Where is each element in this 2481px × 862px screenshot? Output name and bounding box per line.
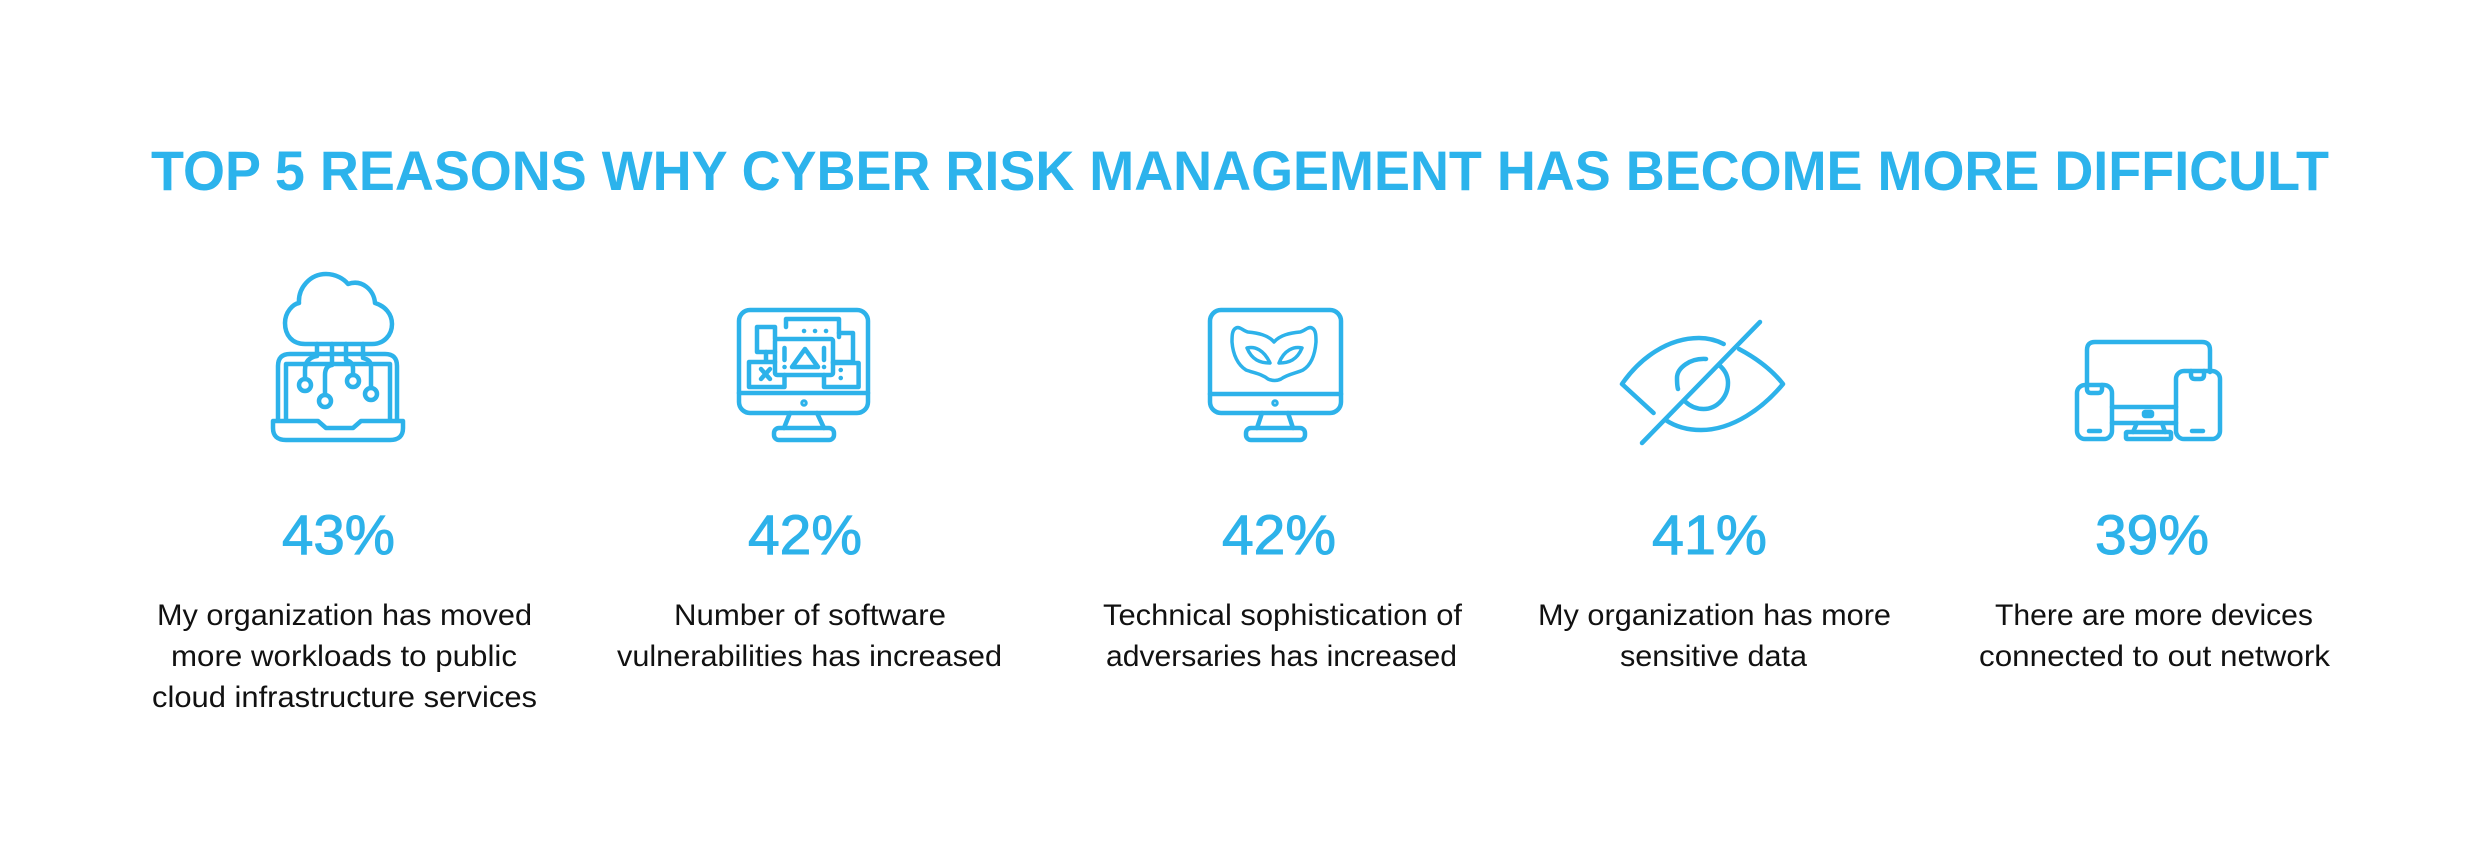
icon: crossed-out eye [1622,322,1783,443]
description: connected devices: connected to out network [1979,640,2331,673]
description: software vulnerabilities [617,599,1002,673]
panel: sensitive data [1538,322,1891,673]
description: cloud workloads: more workloads to public [171,640,517,673]
stat: 39%: 39% [2095,503,2209,566]
description: sensitive data: My organization has more [1538,599,1891,632]
description: connected devices [1979,599,2331,673]
description: sensitive data: sensitive data [1620,640,1807,673]
icon: monitor with mask [1210,310,1341,440]
icon: monitor, phone and tablet [2077,342,2220,439]
panel: public cloud workloads [152,274,537,714]
description: sensitive data [1538,599,1891,673]
description: software vulnerabilities: Number of software [674,599,946,632]
panel: adversary sophistication [1103,310,1463,673]
description: adversary sophistication: Technical sophistication of [1103,599,1463,632]
panel: connected devices [1979,342,2331,673]
stat: 43%: 43% [282,503,395,566]
title: TOP 5 REASONS WHY CYBER RISK MANAGEMENT HAS BECOME MORE DIFFICULT [151,139,2329,202]
panel: software vulnerabilities [617,310,1002,673]
description: cloud workloads: cloud infrastructure services [152,681,537,714]
description: cloud workloads [152,599,537,714]
description: software vulnerabilities: vulnerabilities has increased [617,640,1002,673]
description: connected devices: There are more devices [1995,599,2313,632]
description: cloud workloads: My organization has moved [157,599,532,632]
icon: cloud over laptop [273,274,403,440]
stat: 42%: 42% [1222,503,1336,566]
stat: 42%: 42% [748,503,862,566]
description: adversary sophistication: adversaries has increased [1106,640,1457,673]
icon: monitor with alert windows [739,310,868,440]
description: adversary sophistication [1103,599,1463,673]
stat: 41%: 41% [1652,503,1767,566]
